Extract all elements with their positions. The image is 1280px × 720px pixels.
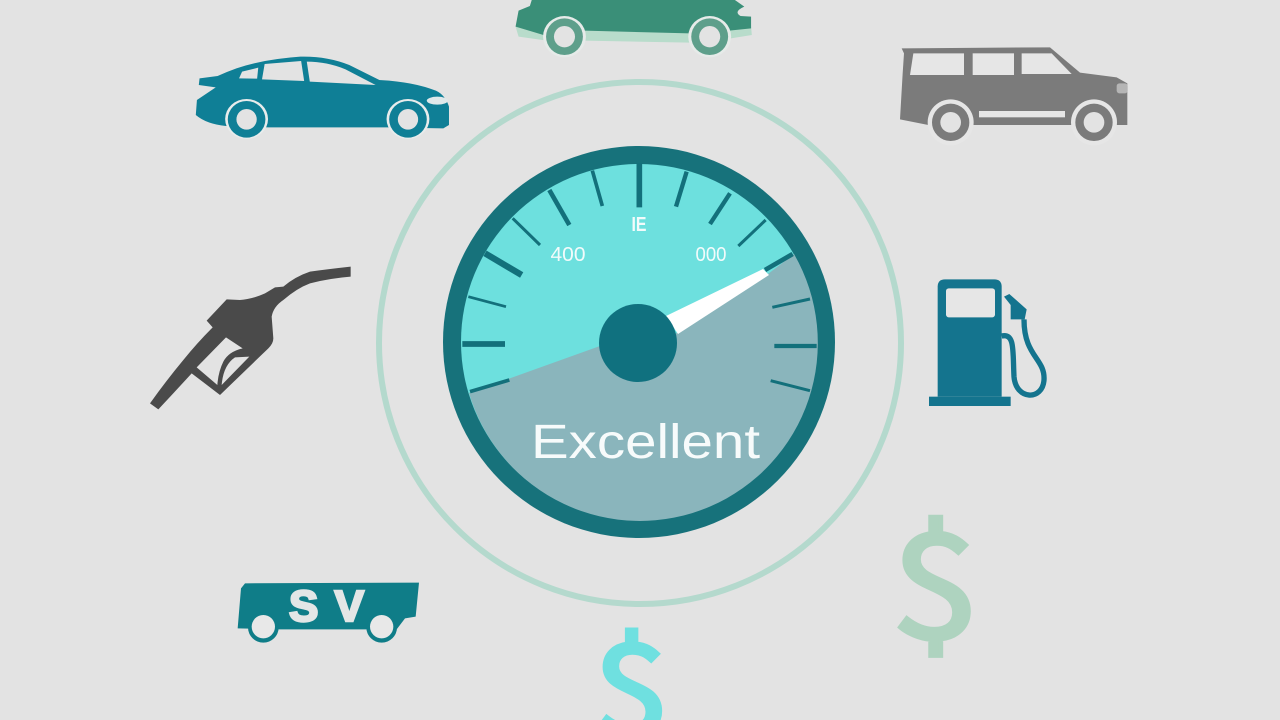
scale label E: IE	[632, 214, 646, 236]
scale label 400: 400	[550, 244, 586, 266]
badge body	[238, 583, 419, 643]
icon: SUV bus badge	[238, 582, 419, 643]
tick marks	[462, 163, 817, 392]
icon: fuel nozzle	[150, 267, 351, 409]
outer pale ring	[379, 82, 901, 604]
icon: teal sedan	[196, 57, 449, 139]
hub	[599, 304, 677, 382]
gauge lower grey sector	[469, 254, 818, 521]
gauge dial cyan face	[461, 164, 817, 520]
icon: green car	[516, 0, 752, 57]
gauge bezel	[443, 146, 835, 538]
rating label: Excellent	[531, 416, 760, 469]
icon: fuel pump	[929, 279, 1044, 406]
scale label 000: 000	[696, 244, 726, 266]
badge label: SV	[289, 582, 365, 631]
gauge	[443, 146, 835, 538]
needle	[666, 269, 769, 334]
icon: pale green dollar: $	[891, 470, 979, 680]
icon: grey van	[900, 47, 1128, 145]
